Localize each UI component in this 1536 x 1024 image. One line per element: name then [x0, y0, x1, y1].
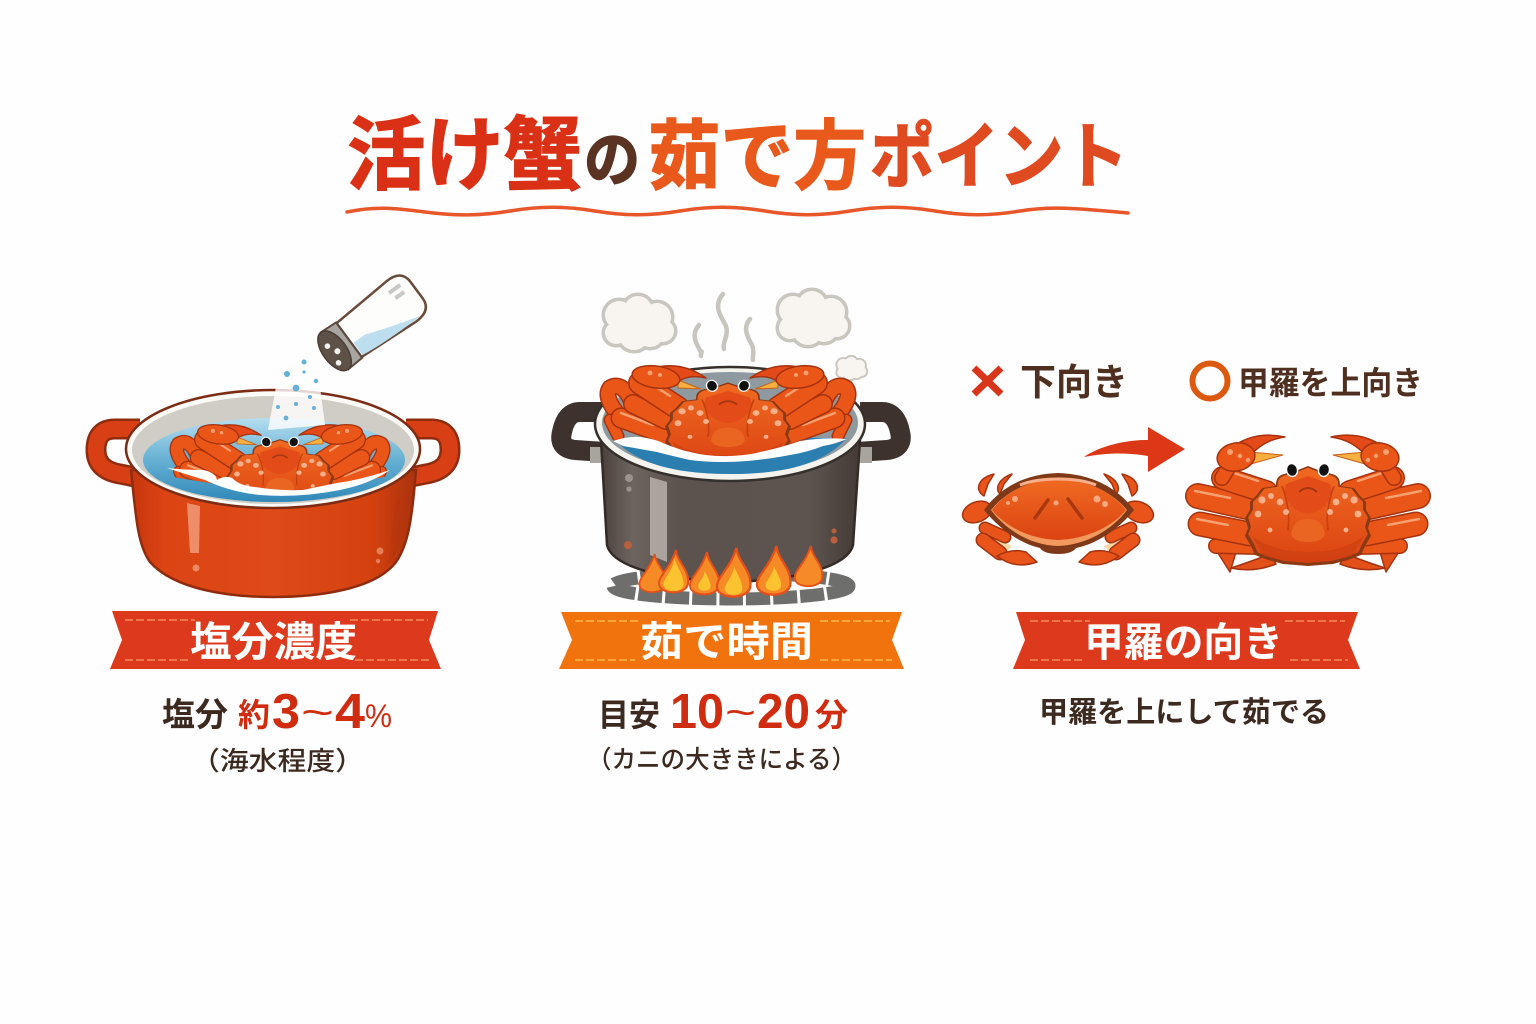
- water: [613, 438, 847, 474]
- pot body: [601, 440, 860, 582]
- text: time estimate: [598, 685, 848, 739]
- title wavy underline: [347, 207, 1128, 215]
- rim and interior: [595, 367, 865, 481]
- panel: boiling time: [559, 291, 904, 774]
- title: ポイント: [870, 118, 1128, 198]
- icon: red pot with crab and salt shaker: [96, 270, 450, 597]
- panel: salt concentration: [96, 270, 450, 776]
- banner: time: [559, 612, 904, 669]
- text: salt ratio: 塩分: [162, 696, 228, 733]
- title: 活け蟹: [347, 111, 582, 200]
- banner: time: 茹で時間: [640, 619, 813, 665]
- banner: salt: 塩分濃度: [190, 619, 357, 665]
- handles: [561, 412, 901, 463]
- boiling water: [143, 418, 405, 502]
- text: shell instruction: 甲羅を上にして茹でる: [1039, 696, 1329, 729]
- title: 茹で方: [648, 115, 866, 200]
- banner: shell: [1013, 612, 1360, 669]
- steam wisps: [695, 294, 753, 360]
- title: [347, 111, 1128, 200]
- burner grate: [613, 573, 849, 599]
- crab in water: [169, 424, 391, 490]
- icon: dark pot on flames with crab: [561, 291, 901, 599]
- icon: circle mark: [1192, 364, 1228, 398]
- banner: salt: [110, 611, 441, 669]
- icon: cross mark: [974, 368, 1001, 394]
- foam: [613, 437, 847, 462]
- salt shaker: [310, 270, 431, 378]
- pot rim and interior: [126, 390, 420, 508]
- text: crab size note: （カニの大ききによる）: [587, 746, 856, 774]
- flames: [639, 546, 822, 597]
- text: salt ratio: 4: [335, 685, 365, 739]
- label: face down: 下向き: [1020, 362, 1128, 403]
- label: shell up: 甲羅を上向き: [1238, 365, 1423, 401]
- text: time estimate: 分: [815, 697, 848, 733]
- text: time estimate: 10: [670, 685, 724, 739]
- text: salt ratio: [162, 685, 392, 739]
- steam clouds: [605, 291, 866, 380]
- icon: crab face view: [1195, 435, 1421, 572]
- text: time estimate: 20: [757, 685, 810, 739]
- text: seawater note: （海水程度）: [191, 746, 364, 776]
- text: salt ratio: 約: [238, 697, 270, 733]
- pot handles: [96, 429, 450, 478]
- foam: [167, 468, 390, 496]
- banner: shell: 甲羅の向き: [1084, 621, 1283, 665]
- text: salt ratio: %: [365, 698, 392, 734]
- panel: shell direction: [959, 362, 1423, 729]
- text: salt ratio: 3: [272, 685, 300, 739]
- text: time estimate: 目安: [598, 697, 660, 733]
- title: の: [584, 127, 640, 194]
- arrow: [1084, 427, 1185, 472]
- text: salt ratio: ~: [301, 691, 334, 735]
- text: time estimate: ~: [725, 691, 756, 735]
- crab in pot: [608, 363, 848, 467]
- falling salt: [268, 360, 325, 430]
- pot body: [131, 470, 416, 597]
- icon: crab shell view: [959, 473, 1157, 565]
